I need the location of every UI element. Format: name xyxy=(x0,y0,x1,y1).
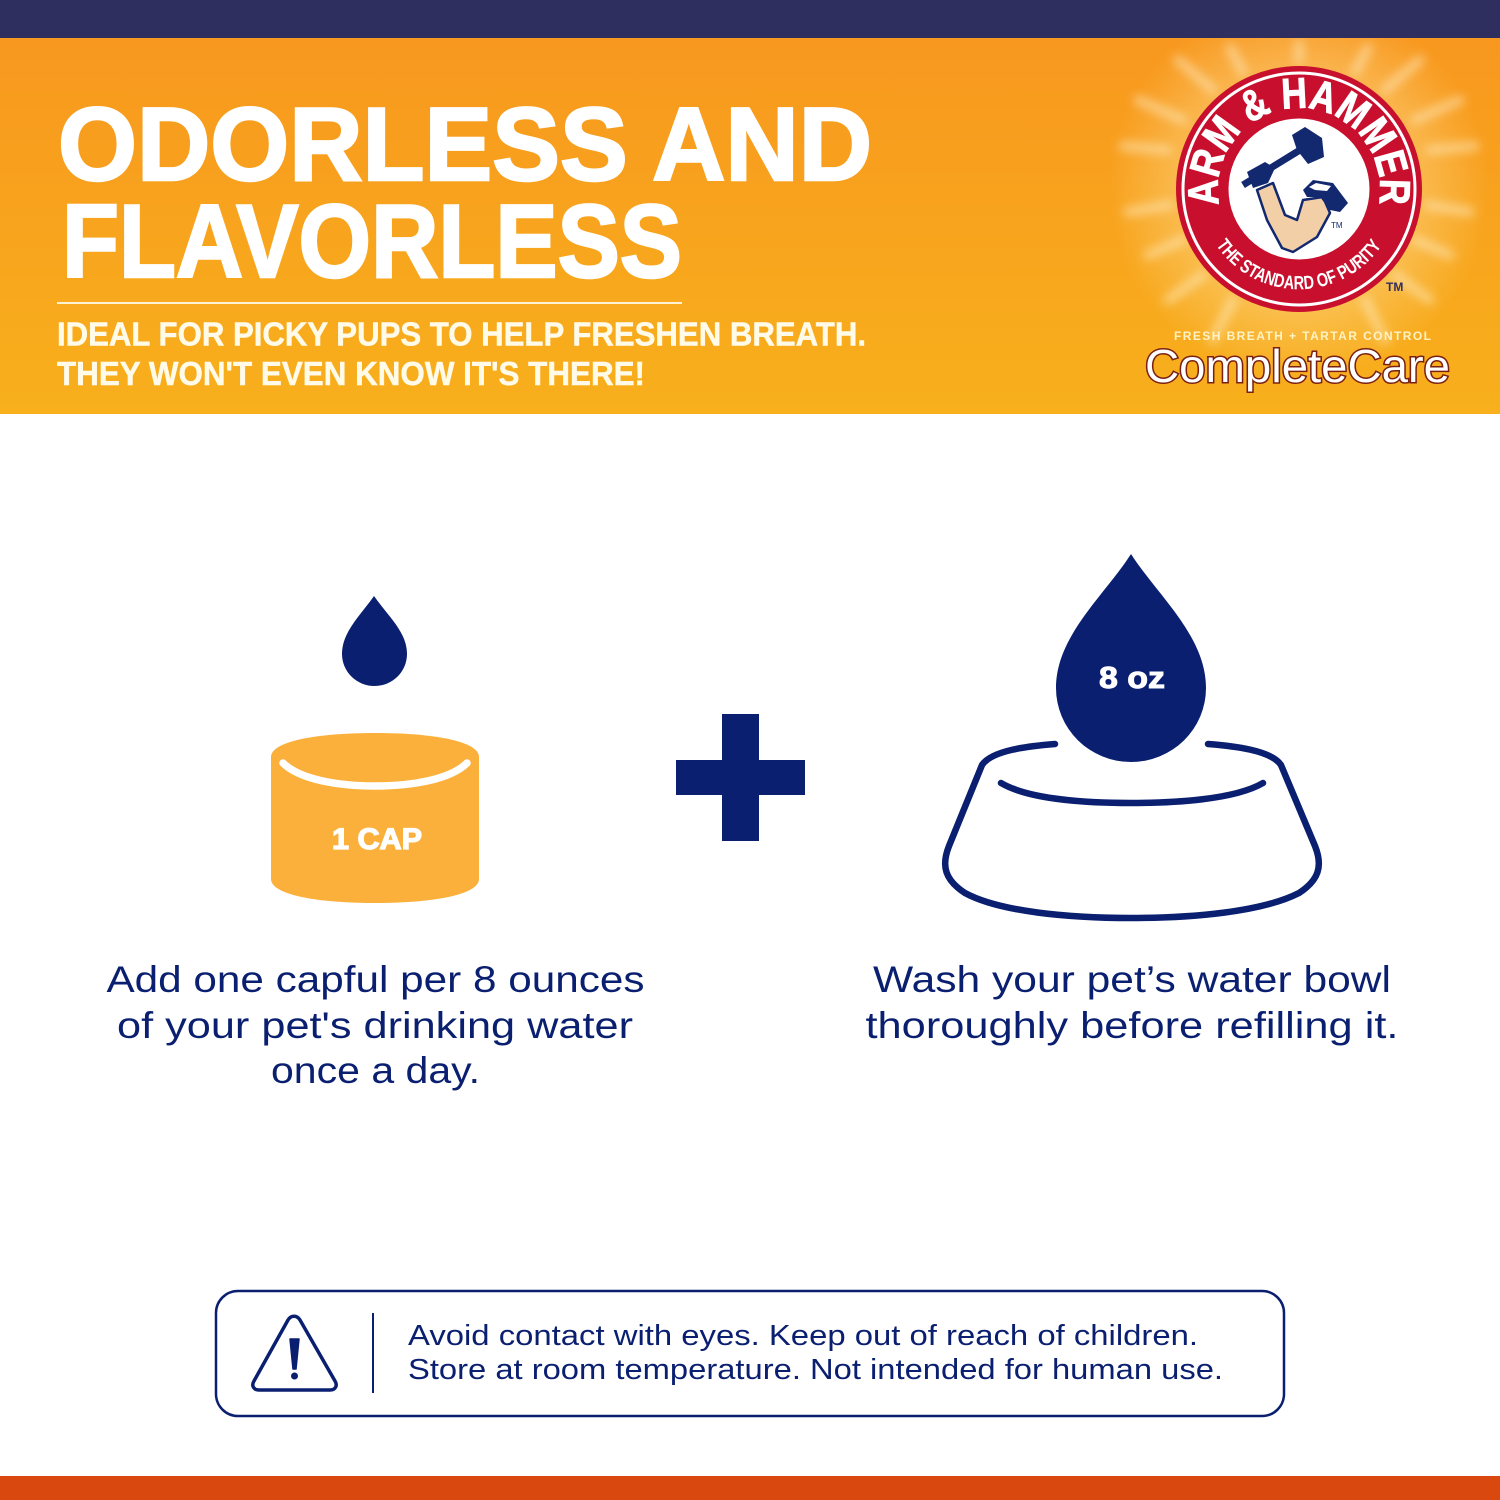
seal xyxy=(1176,66,1422,312)
bottom orange bar xyxy=(0,1476,1500,1500)
icon: water drop small xyxy=(342,596,407,686)
text block: step two: Wash your pet’s water bowl xyxy=(873,959,1391,1000)
large water drop xyxy=(1056,554,1206,762)
text block: step one xyxy=(106,959,644,1091)
text block: step two xyxy=(866,959,1398,1046)
subtitle: THEY WON'T EVEN KNOW IT'S THERE! xyxy=(57,355,645,392)
text block: step one: of your pet's drinking water xyxy=(117,1005,633,1046)
icon: warning triangle xyxy=(253,1316,336,1390)
icon: plus xyxy=(676,714,805,841)
trademark: TM xyxy=(1386,280,1403,294)
text block: step one: once a day. xyxy=(271,1050,480,1091)
title xyxy=(58,87,872,300)
warning panel xyxy=(216,1291,1284,1416)
orange header band xyxy=(0,38,1500,414)
cap label: 1 CAP xyxy=(332,823,422,856)
text block: step two: thoroughly before refilling it. xyxy=(866,1005,1398,1046)
drop label: 8 oz xyxy=(1099,660,1165,695)
sunburst glow xyxy=(1114,38,1484,366)
title: ODORLESS AND xyxy=(58,87,872,203)
icon: water bowl xyxy=(945,554,1319,918)
top navy bar xyxy=(0,0,1500,38)
title: FLAVORLESS xyxy=(62,184,682,300)
brand logo xyxy=(1114,38,1484,393)
arm and hammer mark xyxy=(1243,127,1348,252)
title divider xyxy=(57,302,682,304)
panel divider xyxy=(372,1313,374,1393)
arm and hammer mark: TM xyxy=(1331,221,1343,230)
brand logo: THE STANDARD OF PURITY xyxy=(1218,237,1380,290)
warning text: Avoid contact with eyes. Keep out of reach of children. xyxy=(408,1320,1198,1352)
text block: step one: Add one capful per 8 ounces xyxy=(106,959,644,1000)
subtitle xyxy=(57,316,866,392)
product name: CompleteCare xyxy=(1145,340,1450,392)
seal lettering: ARM & HAMMER xyxy=(1188,78,1410,204)
warning text xyxy=(408,1320,1223,1386)
icon: cap xyxy=(271,733,479,903)
warning text: Store at room temperature. Not intended for human use. xyxy=(408,1354,1223,1386)
logo tagline: FRESH BREATH + TARTAR CONTROL xyxy=(1174,329,1431,343)
subtitle: IDEAL FOR PICKY PUPS TO HELP FRESHEN BREATH. xyxy=(57,316,866,352)
